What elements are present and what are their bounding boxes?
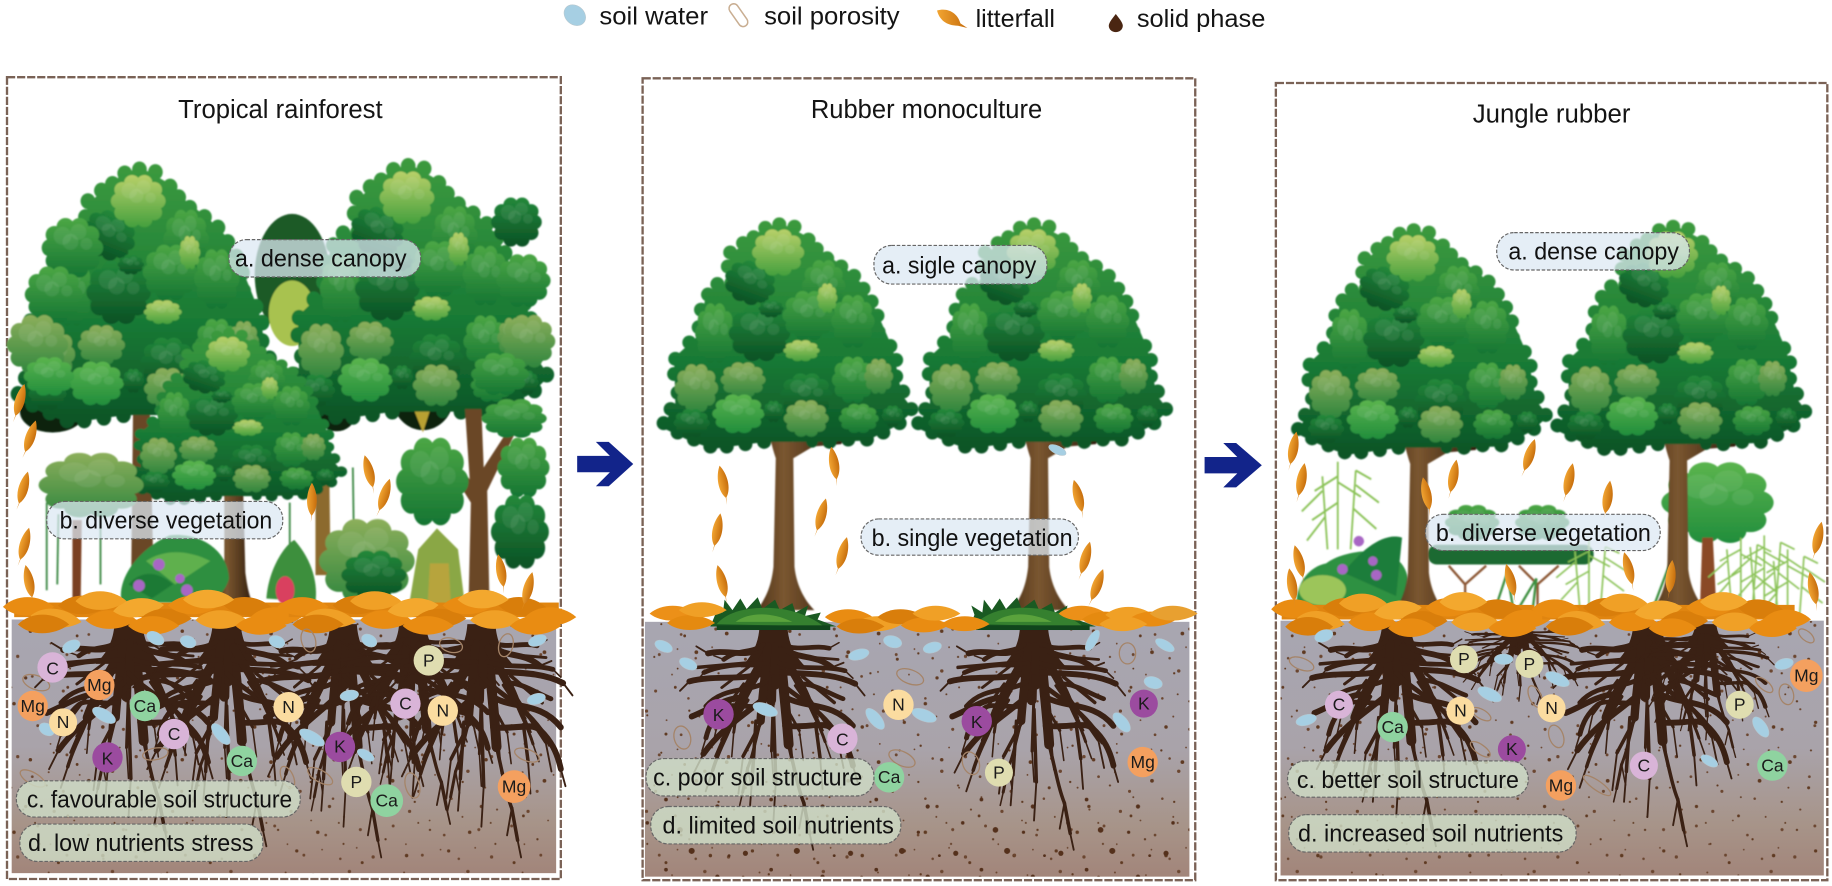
litter layer — [3, 590, 576, 635]
nutrient markers: Ca — [1761, 755, 1784, 775]
nutrient markers: Ca — [1382, 717, 1404, 737]
label: b. diverse vegetation: b. diverse vegetation — [60, 507, 272, 534]
nutrient markers: C — [46, 658, 59, 678]
nutrient markers: N — [892, 695, 905, 715]
rubber trees — [657, 217, 1173, 610]
roots — [1303, 624, 1774, 846]
nutrient markers: P — [993, 762, 1005, 782]
icon: solid phase — [1109, 14, 1123, 32]
legend label: soil water: soil water — [599, 3, 708, 31]
nutrient markers: C — [1333, 695, 1345, 715]
panel: rubber monoculture — [643, 78, 1198, 880]
nutrient markers: C — [836, 730, 849, 750]
legend label: litterfall: litterfall — [976, 5, 1055, 33]
nutrient markers: P — [1734, 695, 1746, 715]
label: a. dense canopy: a. dense canopy — [235, 245, 407, 273]
nutrient markers: N — [1545, 698, 1558, 718]
label: c. favourable soil structure: c. favourable soil structure — [27, 787, 292, 814]
soil layer — [1281, 621, 1824, 875]
nutrient markers: Ca — [134, 696, 156, 716]
panel: jungle rubber — [1271, 83, 1827, 880]
nutrient markers: K — [102, 748, 114, 768]
legend — [560, 1, 1265, 33]
rubber trees — [1291, 220, 1812, 616]
nutrient markers: K — [971, 712, 983, 732]
nutrient markers: Ca — [376, 791, 398, 811]
nutrient markers: K — [334, 737, 346, 757]
label: d. increased soil nutrients — [1289, 815, 1576, 852]
nutrient markers: P — [351, 772, 362, 792]
label: a. sigle canopy: a. sigle canopy — [882, 253, 1036, 280]
icon: soil porosity — [727, 2, 750, 28]
litter layer — [1271, 592, 1811, 637]
nutrient markers: Ca — [878, 767, 901, 787]
label: d. low nutrients stress: d. low nutrients stress — [28, 830, 254, 857]
soil layer — [12, 619, 556, 873]
arrow: monoculture to jungle rubber — [1205, 443, 1262, 487]
roots — [680, 628, 1125, 850]
label: d. increased soil nutrients: d. increased soil nutrients — [1298, 821, 1563, 848]
panel heading: Rubber monoculture — [811, 96, 1042, 124]
label: a. dense canopy — [1497, 233, 1689, 270]
roots — [35, 624, 572, 857]
nutrient markers — [18, 645, 530, 817]
nutrient markers: Mg — [1549, 775, 1573, 795]
soil layer — [645, 622, 1189, 877]
panel frame — [7, 77, 561, 879]
falling leaves — [9, 383, 537, 612]
label: d. limited soil nutrients: d. limited soil nutrients — [662, 812, 894, 839]
nutrient markers: Mg — [87, 675, 111, 695]
label: c. better soil structure: c. better soil structure — [1297, 767, 1519, 794]
nutrient markers: P — [1458, 649, 1470, 669]
falling leaves — [709, 446, 1108, 608]
ground grass — [710, 597, 1096, 630]
label: b. single vegetation: b. single vegetation — [872, 525, 1073, 552]
panel frame — [1276, 83, 1827, 880]
icon: litterfall — [937, 10, 967, 28]
icon: soil water — [560, 1, 590, 30]
nutrient markers: Mg — [502, 776, 526, 796]
nutrient markers — [1325, 645, 1823, 801]
falling leaves — [1284, 431, 1826, 612]
label: a. sigle canopy — [874, 245, 1047, 284]
label: b. diverse vegetation — [47, 501, 283, 539]
panel: tropical rainforest — [3, 77, 576, 879]
nutrient markers: Ca — [231, 751, 253, 771]
nutrient markers: C — [168, 724, 180, 744]
arrow: rainforest to monoculture — [577, 442, 633, 486]
nutrient markers: K — [1506, 739, 1518, 759]
label: c. poor soil structure: c. poor soil structure — [653, 764, 862, 791]
understorey vegetation — [1297, 462, 1825, 619]
nutrient markers: C — [399, 693, 412, 714]
nutrient markers — [703, 690, 1158, 792]
label: b. diverse vegetation: b. diverse vegetation — [1436, 520, 1651, 547]
nutrient markers: K — [713, 705, 725, 725]
panel heading: Jungle rubber — [1473, 101, 1631, 129]
legend label: solid phase: solid phase — [1137, 5, 1265, 33]
label: a. dense canopy — [229, 240, 421, 277]
nutrient markers: K — [1138, 693, 1150, 714]
label: c. poor soil structure — [646, 759, 874, 796]
label: d. limited soil nutrients — [651, 807, 901, 844]
nutrient markers: Mg — [1794, 665, 1818, 685]
nutrient markers: N — [282, 697, 295, 717]
soil water and pores — [653, 442, 1176, 777]
nutrient markers: Mg — [1130, 752, 1155, 772]
nutrient markers: N — [436, 701, 449, 721]
nutrient markers: N — [57, 712, 69, 732]
nutrient markers: P — [423, 650, 435, 670]
soil water and pores — [1287, 626, 1816, 799]
litter layer — [650, 602, 1198, 634]
nutrient markers: Mg — [21, 696, 45, 716]
panel heading: Tropical rainforest — [178, 96, 383, 124]
nutrient markers: P — [1524, 654, 1535, 674]
nutrient markers: C — [1638, 755, 1650, 775]
vegetation — [7, 158, 555, 608]
panel frame — [643, 78, 1195, 880]
label: d. low nutrients stress — [20, 824, 263, 861]
nutrient markers: N — [1454, 701, 1467, 721]
soil water and pores — [18, 627, 548, 800]
label: a. dense canopy: a. dense canopy — [1508, 238, 1679, 265]
legend label: soil porosity: soil porosity — [764, 3, 900, 31]
